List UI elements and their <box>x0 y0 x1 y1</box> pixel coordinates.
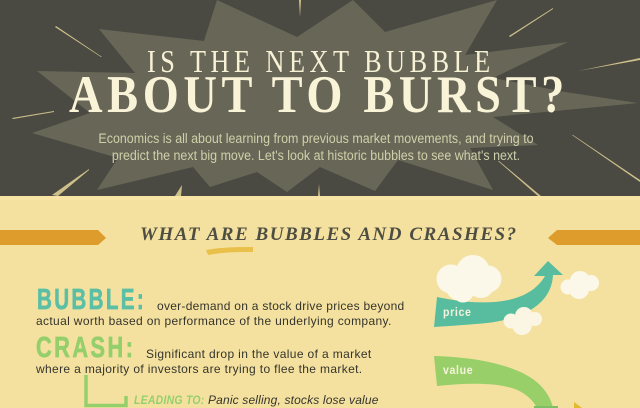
bubble definition line two: actual worth based on performance of the underlying company. <box>36 314 392 328</box>
title line two: ABOUT TO BURST? <box>69 66 569 124</box>
value label: value <box>443 365 473 377</box>
bubble term: BUBBLE: <box>37 284 146 316</box>
yellow arrow tip <box>574 402 582 408</box>
price label: price <box>443 307 472 319</box>
intro text: Economics is all about learning from previous market movements, and trying to <box>98 131 534 146</box>
burst rays <box>12 0 640 196</box>
intro text: predict the next big move. Let's look at historic bubbles to see what's next. <box>112 148 520 163</box>
section heading: WHAT ARE BUBBLES AND CRASHES? <box>140 224 518 245</box>
starburst shape <box>32 0 638 192</box>
crash definition line two: where a majority of investors are trying to flee the market. <box>36 362 362 376</box>
bubble definition line one: over-demand on a stock drive prices beyond <box>157 299 404 313</box>
crash term: CRASH: <box>36 332 135 364</box>
pale strip under header <box>0 196 640 200</box>
leading to label: LEADING TO: <box>134 393 205 407</box>
title line one: IS THE NEXT BUBBLE <box>147 43 495 79</box>
price arrow <box>434 261 563 327</box>
header dark panel <box>0 0 640 196</box>
intro text <box>98 131 534 163</box>
cloud middle <box>504 307 542 335</box>
heading underline brush <box>206 247 253 255</box>
right heading ribbon <box>548 230 640 245</box>
cloud large <box>436 255 502 302</box>
cloud right <box>560 271 599 299</box>
crash bracket connector <box>86 375 126 406</box>
left heading ribbon <box>0 230 106 245</box>
value arrow <box>434 356 558 408</box>
crash definition line one: Significant drop in the value of a market <box>146 347 372 361</box>
leading to text: Panic selling, stocks lose value <box>208 393 379 407</box>
